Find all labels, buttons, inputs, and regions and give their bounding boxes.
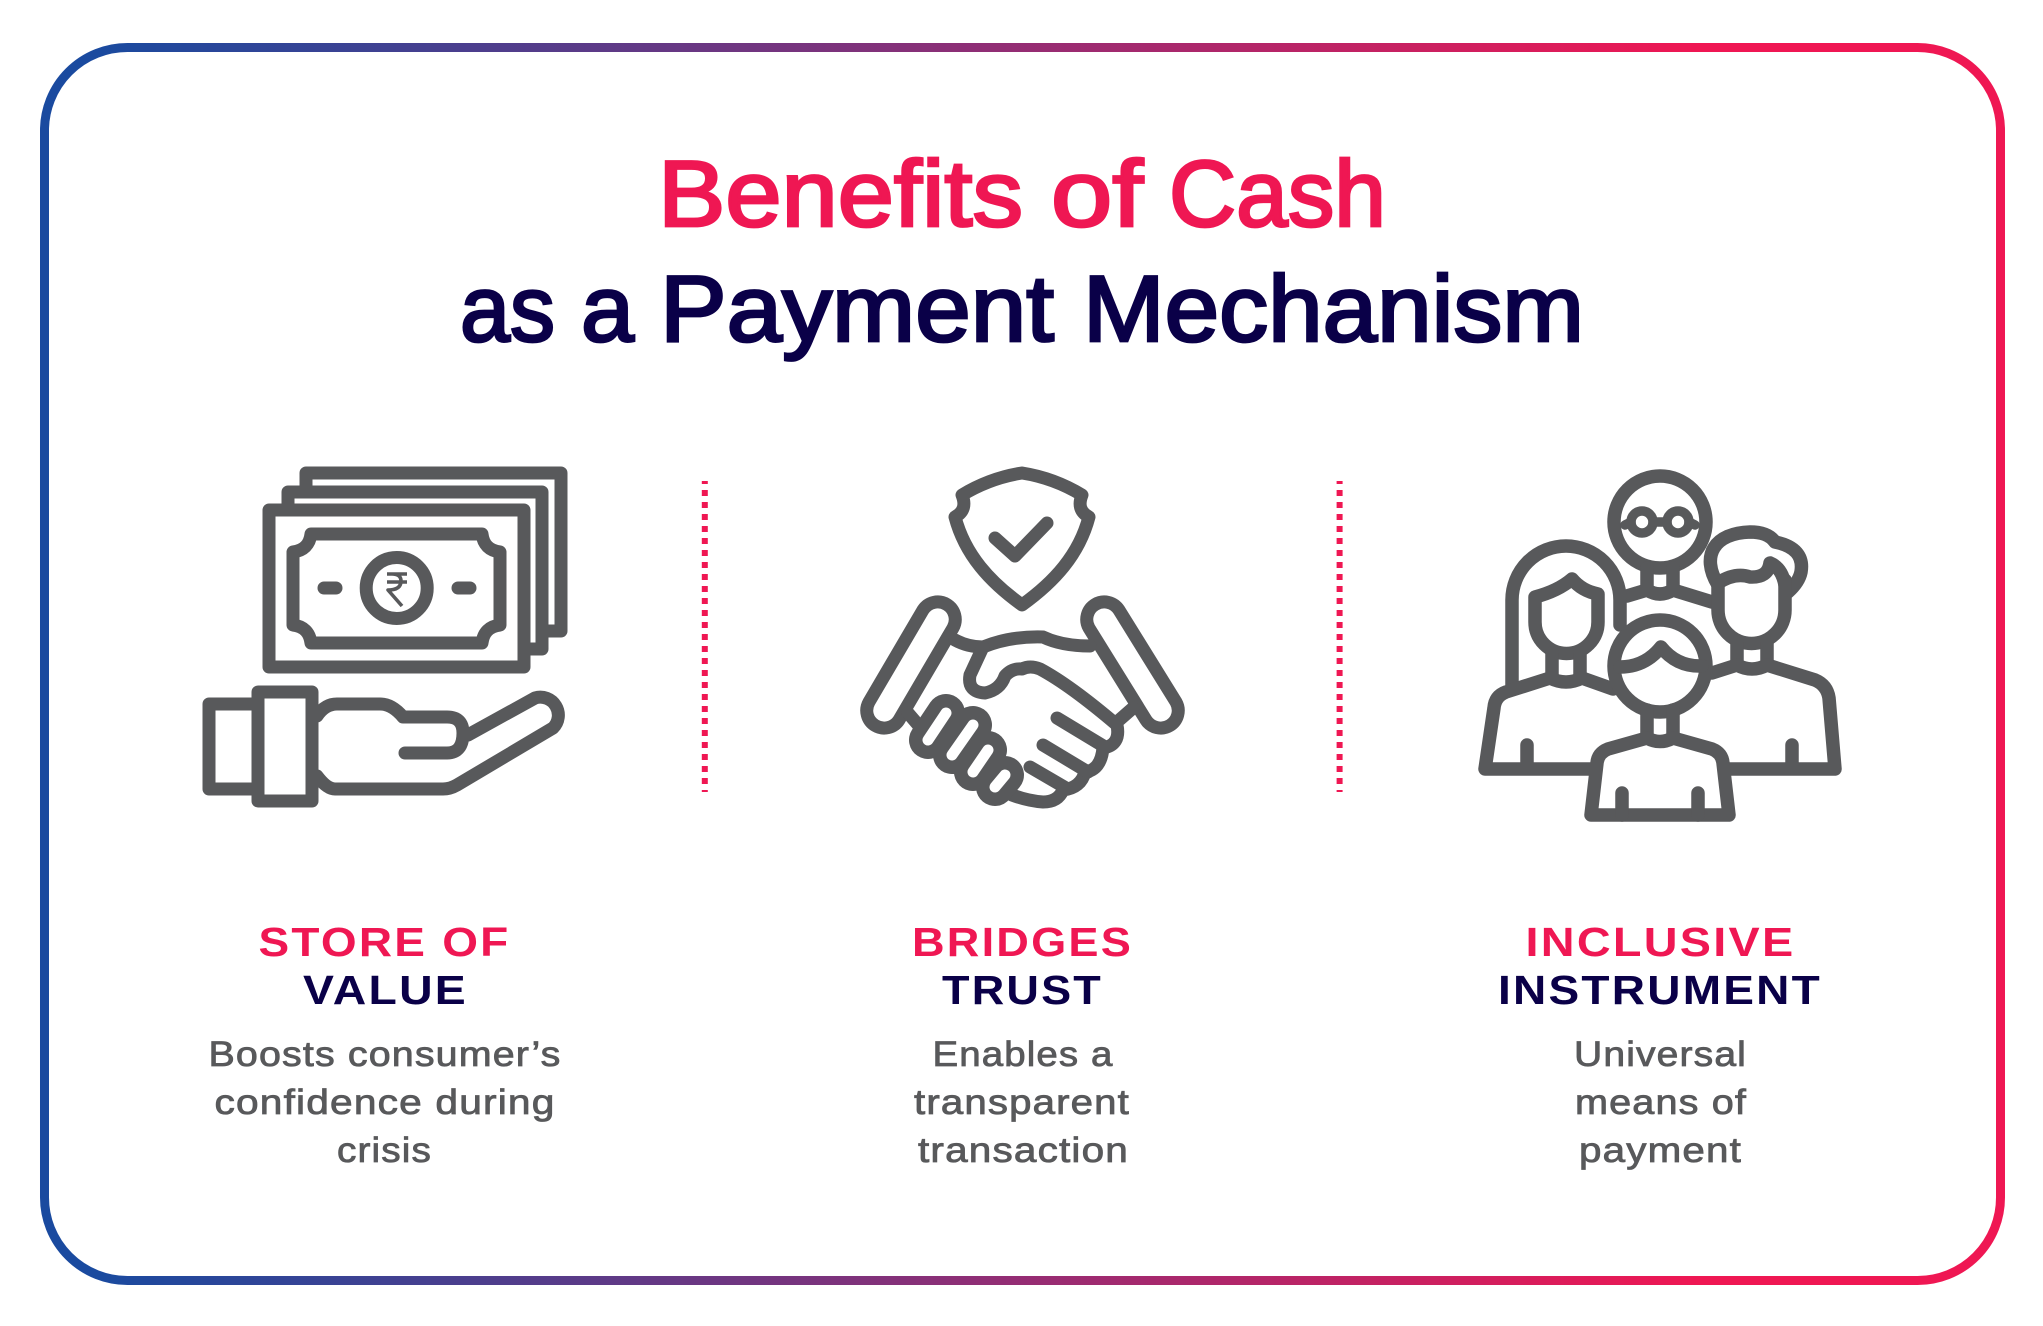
heading: inclusive instrument xyxy=(1498,919,1822,1013)
heading: inclusive instrument: INSTRUMENT xyxy=(1498,967,1822,1013)
description: transparent xyxy=(914,1083,1130,1122)
rupee coin xyxy=(366,558,427,618)
woman face xyxy=(1535,579,1598,654)
shield xyxy=(955,473,1089,605)
right cuff xyxy=(1087,602,1178,728)
top person neck and shoulders xyxy=(1627,568,1712,602)
heading: store of value: VALUE xyxy=(303,967,468,1013)
description xyxy=(914,1035,1130,1170)
man face xyxy=(1718,580,1785,643)
knuckle gaps xyxy=(928,713,1005,787)
middle note xyxy=(288,492,542,649)
description: Universal xyxy=(1574,1035,1747,1074)
arm line xyxy=(955,637,1090,647)
glasses xyxy=(1625,511,1695,533)
front person neck xyxy=(1647,710,1673,738)
icon: shield and handshake xyxy=(867,473,1178,802)
title line 1: of xyxy=(1051,141,1144,246)
description: payment xyxy=(1579,1131,1742,1170)
heading: bridges trust: TRUST xyxy=(942,967,1103,1013)
title line 1: Cash xyxy=(1169,141,1386,246)
front person arms xyxy=(1622,793,1698,815)
title xyxy=(460,141,1584,361)
description: crisis xyxy=(337,1131,432,1170)
heading: store of value xyxy=(258,919,510,1013)
woman hair xyxy=(1512,546,1620,685)
icon: group of people xyxy=(1485,476,1835,815)
title line 2 xyxy=(460,256,1584,361)
man body xyxy=(1712,665,1835,769)
description: Boosts consumer’s xyxy=(208,1035,562,1074)
back note xyxy=(306,473,561,631)
right hand xyxy=(908,647,1133,802)
column 3 text xyxy=(1498,919,1822,1170)
icon: hand holding rupee notes xyxy=(209,473,561,801)
man hair xyxy=(1710,532,1801,592)
finger lines xyxy=(1030,718,1105,788)
divider right xyxy=(1337,481,1343,792)
description: means of xyxy=(1575,1083,1747,1122)
man neck xyxy=(1737,642,1767,665)
left cuff xyxy=(867,602,955,728)
title line 1 xyxy=(658,141,1386,246)
description xyxy=(1574,1035,1747,1170)
heading: bridges trust xyxy=(912,919,1133,1013)
top person head xyxy=(1614,476,1706,568)
heading: bridges trust: BRIDGES xyxy=(912,919,1133,965)
front person hair xyxy=(1620,647,1702,667)
outer cuff xyxy=(209,704,258,789)
title line 2: Mechanism xyxy=(1083,256,1584,361)
front note xyxy=(269,510,524,667)
note dashes xyxy=(324,582,470,594)
left hand knuckles xyxy=(928,713,1005,787)
heading: inclusive instrument: INCLUSIVE xyxy=(1526,919,1796,965)
description xyxy=(208,1035,562,1170)
column 1 text xyxy=(208,919,562,1170)
note inner frame xyxy=(293,534,500,643)
column 2 text xyxy=(912,919,1133,1170)
hand xyxy=(317,697,558,789)
woman body xyxy=(1485,678,1613,769)
description: Enables a xyxy=(932,1035,1114,1074)
title line 1: Benefits xyxy=(658,141,1023,246)
title line 2: a xyxy=(581,256,635,361)
description: transaction xyxy=(918,1131,1129,1170)
woman neck xyxy=(1552,653,1580,676)
check mark xyxy=(995,523,1047,556)
title line 2: as xyxy=(460,256,555,361)
front person body xyxy=(1591,738,1729,815)
rupee symbol xyxy=(387,574,407,606)
title line 2: Payment xyxy=(660,256,1054,361)
heading: store of value: STORE OF xyxy=(258,919,510,965)
description: confidence during xyxy=(214,1083,556,1122)
divider left xyxy=(702,481,708,792)
inner cuff xyxy=(258,692,312,801)
front person head xyxy=(1614,620,1706,712)
